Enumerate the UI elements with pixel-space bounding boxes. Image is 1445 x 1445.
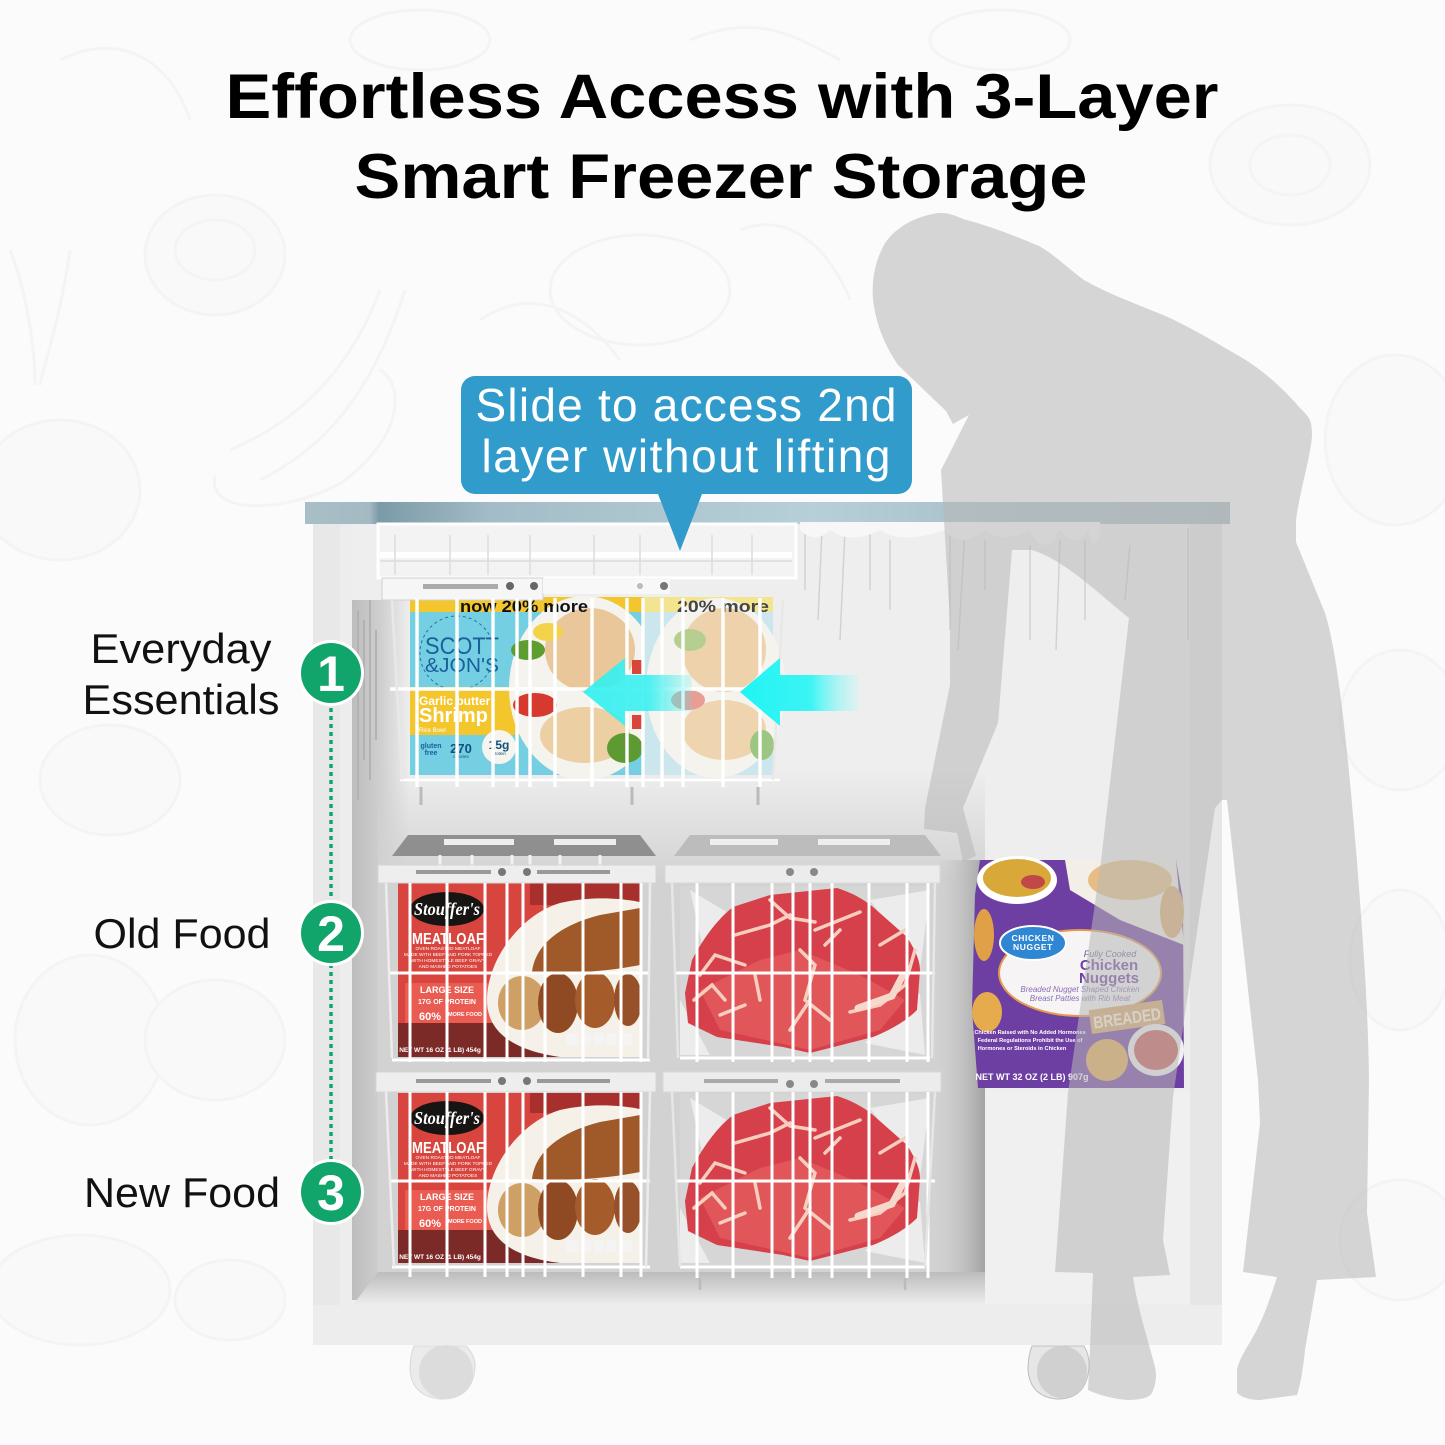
meatloaf box: MADE WITH BEEF AND PORK TOPPED [404,952,493,958]
meatloaf box: MORE FOOD [448,1219,482,1225]
freezer outer shell [313,520,1222,1345]
product box: Scott & Jon's: 270 [450,741,472,756]
wheel right [1028,1346,1089,1399]
frost icicles [805,528,1188,650]
steak [680,1094,930,1266]
chicken nugget bag: Chicken [1080,957,1138,974]
chicken nugget bag: Breaded Nugget Shaped Chicken [1020,985,1140,994]
faded ghost of box after sliding [643,597,786,778]
product box: Scott & Jon's: Shrimp [419,705,488,727]
meatloaf box: WITH HOMESTYLE BEEF GRAVY [411,1167,486,1173]
meatloaf box: AND MASHED POTATOES [419,964,477,970]
callout bubble: Slide to access 2nd [476,379,896,431]
bag upper panel [1065,860,1184,945]
chicken nugget bag: Hormones or Steroids in Chicken [978,1046,1067,1052]
meatloaf box: AND MASHED POTATOES [419,1173,477,1179]
step 3 badge [298,1159,364,1225]
label: everyday essentials: Everyday [90,625,272,672]
product box: Scott & Jon's: protein [492,751,506,756]
title [226,62,1218,212]
faded ghost of box after sliding: 20% more [677,597,769,616]
label: everyday essentials [82,625,280,723]
title: Smart Freezer Storage [354,142,1088,212]
meatloaf box: 60% [419,1218,441,1230]
compressor step [985,1092,1190,1304]
meatloaf box: NET WT 16 OZ (1 LB) 454g [399,1047,481,1054]
step 1 badge [298,640,364,706]
product box: Scott & Jon's: calories [453,754,469,759]
label: new food: New Food [84,1169,280,1216]
callout bubble: layer without lifting [482,430,890,482]
chicken nugget bag: Breast Patties with Rib Meat [1030,994,1131,1003]
steak [680,886,930,1058]
freezer interior back wall [352,524,1190,1304]
step 2 badge: 2 [317,906,345,962]
wheel left [410,1345,475,1399]
step 3 badge: 3 [317,1165,345,1221]
wires [386,1092,650,1277]
basket upper frame [378,524,796,578]
chicken nugget bag: Federal Regulations Prohibit the Use of [978,1038,1083,1044]
product box: Scott & Jon's: Garlic butter [419,694,491,708]
chicken nugget bag: CHICKEN [1012,933,1054,943]
chicken nugget bag: Chicken Raised with No Added Hormones [974,1030,1086,1036]
chicken nugget bag: BREADED [1092,1004,1162,1033]
chicken nugget bag [972,856,1184,1088]
top layer sliding basket [378,524,796,805]
freezer lid band [305,502,1230,524]
product box: Scott & Jon's: SCOTT [425,633,499,660]
chest freezer body [305,502,1230,1345]
product box: Scott & Jon's: now 20% more [460,597,588,616]
product box: Scott & Jon's: free [425,750,438,757]
product box: Scott & Jon's: &JON'S [425,655,499,677]
chicken nugget bag: NET WT 32 OZ (2 LB) 907g [975,1072,1089,1082]
bag oval label [999,930,1161,1016]
basket: steak upper right [665,835,941,1062]
chicken nugget bag: Nuggets [1079,970,1139,987]
meatloaf box: MADE WITH BEEF AND PORK TOPPED [404,1161,493,1167]
basket: steak lower right [663,1072,941,1290]
product box: Scott & Jon's: Rice Bowl [419,728,446,734]
chicken nugget bag: Fully Cooked [1084,949,1137,959]
front band [376,1072,656,1092]
meatloaf box [398,1093,642,1263]
meatloaf box [398,883,642,1057]
label: everyday essentials: Essentials [82,676,280,723]
label: old food: Old Food [94,910,270,957]
product box: Scott & Jon's [410,596,661,780]
front band [378,865,656,883]
meatloaf box: OVEN ROASTED MEATLOAF [416,946,481,952]
basket: meatloaf upper left [378,835,656,1062]
product box: Scott & Jon's: 15g [489,738,509,752]
dotted connector line [329,708,333,1160]
arrow: slide direction [740,658,858,726]
slide rail [392,835,656,856]
title: Effortless Access with 3-Layer [226,62,1218,132]
meatloaf box: MEATLOAF [412,931,484,948]
wires [386,883,650,1062]
meatloaf box: 60% [419,1011,441,1023]
silhouette of woman bending over freezer [873,213,1376,1400]
callout bubble [461,376,912,551]
meatloaf box: LARGE SIZE [420,1192,474,1202]
meatloaf box: LARGE SIZE [420,985,474,995]
meatloaf box: OVEN ROASTED MEATLOAF [416,1155,481,1161]
product box: Scott & Jon's: gluten [420,743,442,750]
basket: meatloaf lower left [376,1072,656,1277]
meatloaf box: NET WT 16 OZ (1 LB) 454g [399,1254,481,1261]
meatloaf box: 17G OF PROTEIN [418,1206,476,1213]
meatloaf box: 17G OF PROTEIN [418,999,476,1006]
basket slide rail [382,578,543,600]
chicken nugget bag: NUGGET [1013,942,1053,952]
meatloaf box: MEATLOAF [412,1140,484,1157]
basket wires [390,598,788,787]
arrow: slide direction ghost [583,658,692,726]
meatloaf box: MORE FOOD [448,1012,482,1018]
meatloaf box: Stouffer's [414,899,480,919]
freezer front lip [313,1305,1222,1345]
meatloaf box: WITH HOMESTYLE BEEF GRAVY [411,958,486,964]
step 1 badge: 1 [317,646,345,702]
meatloaf box: Stouffer's [414,1108,480,1128]
step 2 badge [298,900,364,966]
